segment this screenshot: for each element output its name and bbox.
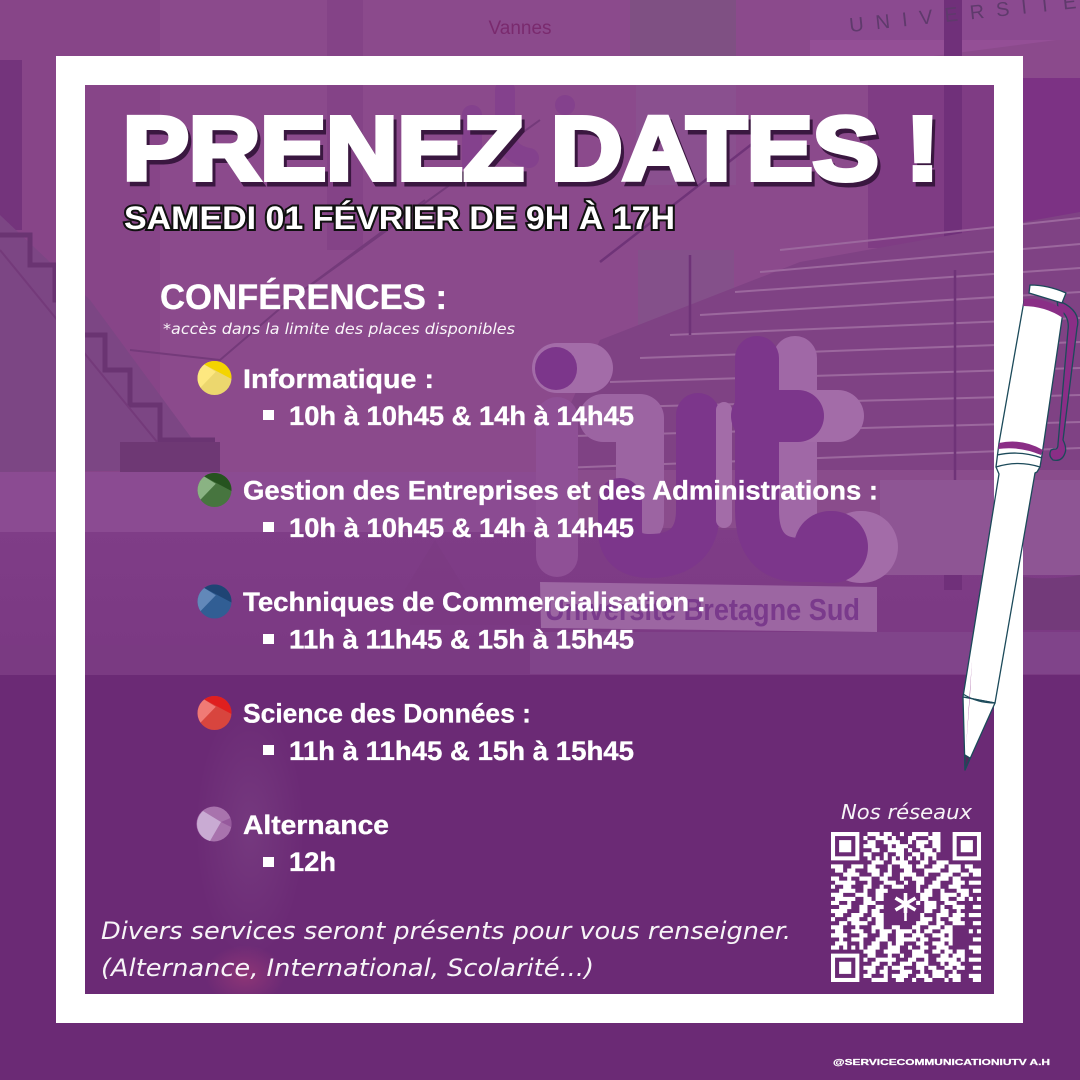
- list item: Informatique: 10h à 10h45 & 14h à 14h45: [289, 401, 634, 431]
- icon: QR asterisk logo: [896, 893, 916, 921]
- list item: Alternance: Alternance: [243, 810, 389, 840]
- background: lens flare: [195, 700, 305, 1005]
- list item: Alternance: 12h: [289, 847, 336, 877]
- background: ground texture: [0, 480, 1080, 675]
- note: seating limit: *accès dans la limite des places disponibles: [163, 320, 515, 338]
- list item: Informatique: [198, 361, 634, 431]
- background: giant iut logo sculpture: [556, 358, 862, 560]
- background: Université Bretagne Sud plaque: [540, 582, 877, 632]
- title: PRENEZ DATES !: [123, 100, 939, 200]
- background: left staircase: [0, 120, 540, 472]
- subtitle: date: SAMEDI 01 FÉVRIER DE 9H À 17H: [124, 199, 675, 236]
- list item: Techniques de Commercialisation: [198, 584, 706, 654]
- icon: red circle: [198, 696, 232, 730]
- footer note: Divers services seront présents pour vous renseigner.: [101, 917, 791, 945]
- background photo: IUT building tinted purple: Vannes: [488, 18, 552, 39]
- QR code: [831, 834, 981, 980]
- footer note: [101, 917, 791, 982]
- icon: green circle: [198, 473, 232, 507]
- icon: lilac circle: [196, 806, 232, 842]
- list item: Techniques de Commercialisation: 11h à 11h45 & 15h à 15h45: [289, 624, 634, 654]
- title: PRENEZ DATES !: [126, 104, 942, 204]
- list item: Science des Données: [198, 696, 634, 766]
- background: Université Bretagne Sud plaque: Université Bretagne Sud: [545, 592, 860, 627]
- list item: Gestion des Entreprises et des Administrations: [198, 473, 878, 543]
- icon: white pen: [963, 285, 1078, 770]
- list item: Techniques de Commercialisation: Techniques de Commercialisation :: [243, 587, 706, 617]
- background: main staircase: [540, 130, 1080, 530]
- footer note: (Alternance, International, Scolarité...): [101, 954, 594, 982]
- list item: Alternance: [196, 806, 389, 877]
- list item: Gestion des Entreprises et des Administrations: 10h à 10h45 & 14h à 14h45: [289, 513, 634, 543]
- label: nos réseaux: Nos réseaux: [841, 800, 972, 824]
- credit handle: @SERVICECOMMUNICATIONIUTV A.H: [833, 1057, 1050, 1067]
- icon: blue circle: [198, 584, 232, 618]
- heading: conférences: CONFÉRENCES :: [160, 277, 447, 317]
- list item: Informatique: Informatique :: [243, 364, 434, 394]
- icon: yellow circle: [198, 361, 232, 395]
- pen clip: [1050, 300, 1078, 460]
- list item: Science des Données: Science des Données :: [243, 698, 531, 728]
- list item: Science des Données: 11h à 11h45 & 15h à 15h45: [289, 736, 634, 766]
- list item: Gestion des Entreprises et des Administrations: Gestion des Entreprises et des Administrations :: [243, 476, 878, 506]
